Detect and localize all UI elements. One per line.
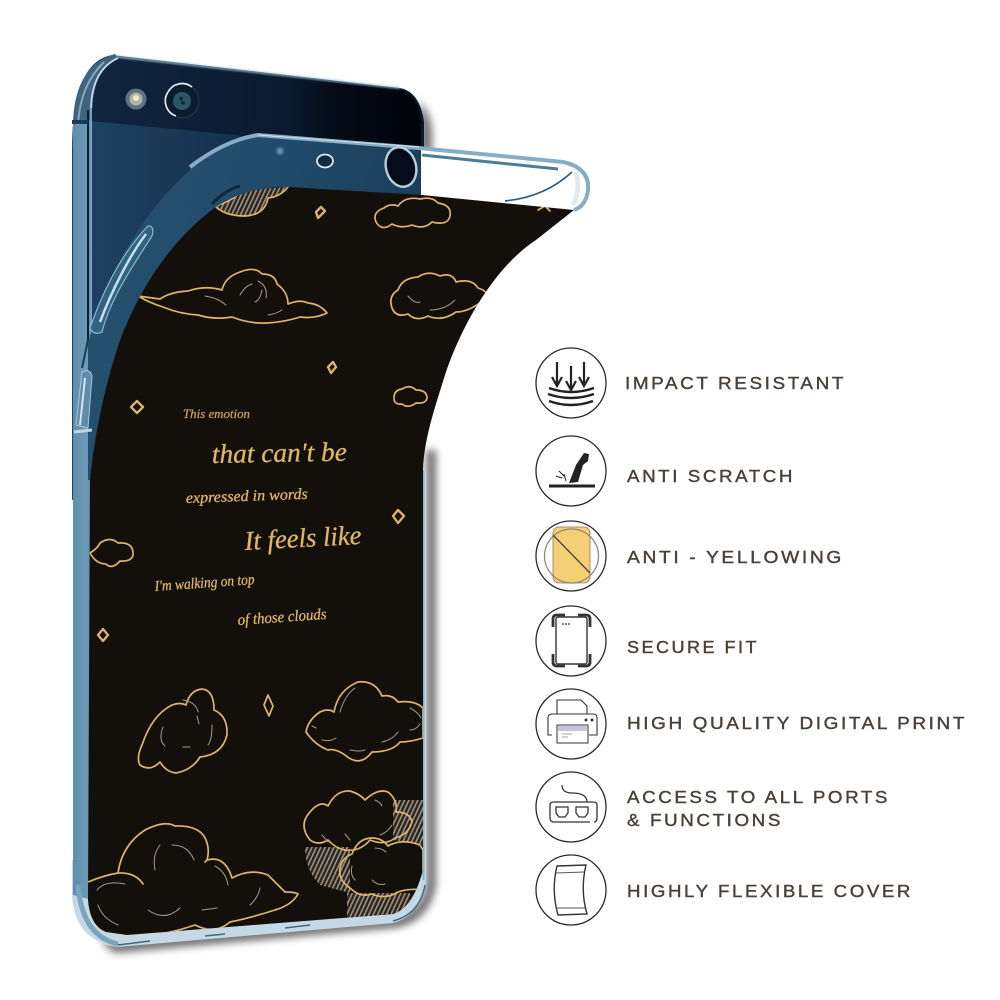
sheet corner fragment xyxy=(538,206,550,211)
shadow of phone xyxy=(100,92,436,953)
printed back sheet xyxy=(88,187,574,935)
label: IMPACT RESISTANT xyxy=(625,373,846,393)
star xyxy=(98,629,108,641)
star xyxy=(328,362,336,373)
cloud: right xyxy=(391,273,487,319)
camera xyxy=(165,84,199,118)
right rim xyxy=(422,470,424,880)
rim top dark shade xyxy=(73,54,118,125)
star xyxy=(264,695,273,716)
case flash hole xyxy=(276,148,333,168)
storm cloud: upper xyxy=(304,791,412,850)
feature: access to all ports xyxy=(536,772,890,842)
clear case: white window at top right xyxy=(419,147,588,210)
feature: high quality digital print xyxy=(536,689,967,759)
cloud: small left xyxy=(90,540,133,566)
feature: anti yellowing xyxy=(536,521,844,591)
lyric line 4: It feels like xyxy=(243,520,362,556)
sheet artwork xyxy=(88,187,550,932)
lyric line 3: expressed in words xyxy=(186,486,308,507)
bottom rim dark lines xyxy=(118,885,425,945)
label: SECURE FIT xyxy=(627,637,759,657)
label: ACCESS TO ALL PORTS xyxy=(627,787,890,807)
lyric line 5: I'm walking on top xyxy=(153,572,255,595)
label: HIGH QUALITY DIGITAL PRINT xyxy=(627,713,967,733)
icon: bent cover xyxy=(536,855,606,925)
label: ANTI - YELLOWING xyxy=(627,547,844,567)
star xyxy=(131,401,143,413)
label: ANTI SCRATCH xyxy=(627,466,795,486)
storm cloud: lower xyxy=(340,838,423,897)
case rim highlight xyxy=(190,135,588,210)
label: HIGHLY FLEXIBLE COVER xyxy=(627,881,913,901)
icon: arrows and layers xyxy=(536,348,606,418)
case camera cutout xyxy=(381,144,421,190)
cloud: middle right xyxy=(306,682,423,761)
star xyxy=(316,207,325,218)
phone mockup xyxy=(72,54,588,953)
icon: phone in bumper xyxy=(536,606,606,676)
rim stripes xyxy=(72,58,118,340)
feature: impact resistant xyxy=(536,348,846,418)
feature: secure fit xyxy=(536,606,759,676)
lyric line 6: of those clouds xyxy=(237,606,327,629)
phone body: glass back xyxy=(72,55,424,500)
cloud: bottom big xyxy=(88,824,298,932)
cloud: small right xyxy=(394,387,427,406)
bottom rim xyxy=(72,470,426,947)
feature: highly flexible cover xyxy=(536,855,913,925)
cloud: middle left xyxy=(138,689,227,773)
storm cloud hatching xyxy=(305,800,423,920)
cloud: top right xyxy=(375,198,450,228)
lyric text xyxy=(153,407,362,629)
icon: blade on surface xyxy=(536,436,606,506)
cloud: long xyxy=(138,269,327,323)
bottom rim left stroke xyxy=(78,885,118,944)
case lower side button xyxy=(74,340,92,432)
icon: ports xyxy=(536,772,606,842)
icon: yellow case xyxy=(536,521,606,591)
case side button xyxy=(90,226,153,333)
feature: anti scratch xyxy=(536,436,795,506)
label second line: & FUNCTIONS xyxy=(627,810,783,830)
phone top highlight xyxy=(112,56,400,88)
flash xyxy=(126,88,146,110)
sheet background xyxy=(88,187,574,935)
star xyxy=(393,510,404,523)
icon: printer xyxy=(536,689,606,759)
cloud: partial top xyxy=(215,187,288,216)
lyric line 1: This emotion xyxy=(183,407,250,421)
lyric line 2: that can't be xyxy=(212,437,347,469)
left rim xyxy=(73,54,118,900)
clear case: curved blue band xyxy=(88,135,421,480)
